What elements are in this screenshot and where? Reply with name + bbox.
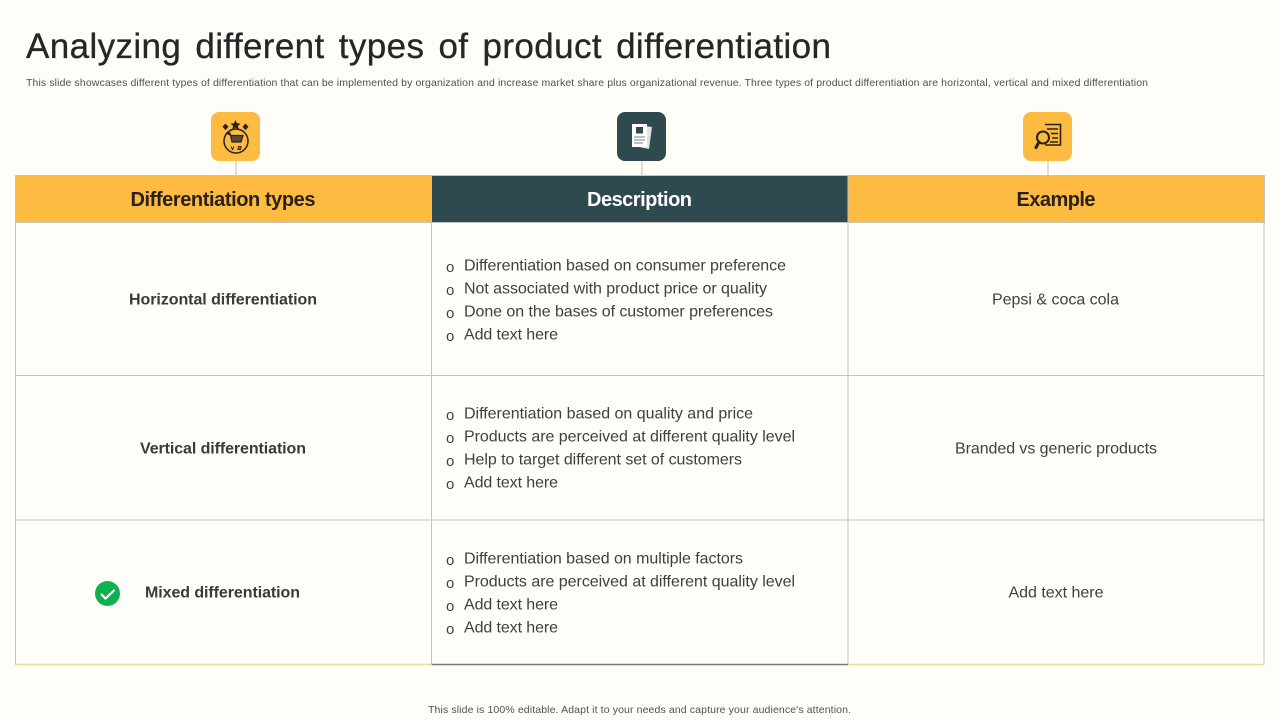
subtitle: This slide showcases different types of differentiation that can be implemented by organization and increase market share plus organizational revenue. Three types of product differentiation are horizontal, vertical and mixed differentiation: [26, 77, 1148, 89]
description bullets: o: [446, 453, 454, 470]
type label: Mixed differentiation: [145, 584, 300, 602]
title: Analyzing different types of product differentiation: [26, 27, 831, 66]
icon: documents: [617, 112, 666, 176]
type label: Vertical differentiation: [140, 440, 306, 458]
description bullets: o: [446, 476, 454, 493]
description bullets: Done on the bases of customer preferences: [464, 304, 773, 320]
header: differentiation types: Differentiation types: [130, 189, 316, 211]
description bullets: Products are perceived at different quality level: [464, 574, 795, 590]
description bullets: Add text here: [464, 596, 558, 614]
description bullets: o: [446, 282, 454, 299]
row: vertical differentiation: [140, 406, 1157, 493]
header: differentiation types: [15, 176, 432, 222]
example: Add text here: [1008, 584, 1104, 602]
description bullets: o: [446, 552, 454, 569]
description bullets: o: [446, 575, 454, 592]
example: Branded vs generic products: [955, 440, 1157, 458]
description bullets: Not associated with product price or quality: [464, 280, 767, 298]
description bullets: Differentiation based on consumer preference: [464, 258, 786, 274]
description bullets: o: [446, 598, 454, 615]
header: example: [848, 176, 1264, 222]
description bullets: Differentiation based on multiple factors: [464, 550, 743, 568]
icon: green check: [95, 581, 120, 606]
description bullets: Help to target different set of customers: [464, 452, 742, 468]
type label: Horizontal differentiation: [129, 292, 317, 308]
header outline: [15, 176, 1265, 222]
header: description: [432, 176, 848, 222]
icon: shopping cart with stars: [211, 112, 260, 176]
example: Pepsi & coca cola: [992, 292, 1119, 308]
footer note: This slide is 100% editable. Adapt it to your needs and capture your audience's attention.: [428, 704, 851, 716]
header row: [15, 176, 1265, 222]
description bullets: Add text here: [464, 474, 558, 492]
row: mixed differentiation: [95, 550, 1104, 638]
header: example: Example: [1016, 189, 1096, 211]
description bullets: [446, 258, 786, 345]
description bullets: o: [446, 621, 454, 638]
description bullets: o: [446, 259, 454, 276]
description bullets: o: [446, 305, 454, 322]
description bullets: Add text here: [464, 620, 558, 636]
description bullets: o: [446, 430, 454, 447]
description bullets: Differentiation based on quality and price: [464, 406, 753, 422]
description bullets: [446, 550, 795, 638]
header: description: Description: [587, 189, 692, 211]
description bullets: o: [446, 407, 454, 424]
table grid: [15, 222, 1264, 664]
description bullets: Add text here: [464, 326, 558, 344]
description bullets: o: [446, 328, 454, 345]
icon: magnifier over list: [1023, 112, 1072, 176]
description bullets: [446, 406, 795, 493]
row: horizontal differentiation: [129, 258, 1119, 345]
description bullets: Products are perceived at different quality level: [464, 428, 795, 446]
